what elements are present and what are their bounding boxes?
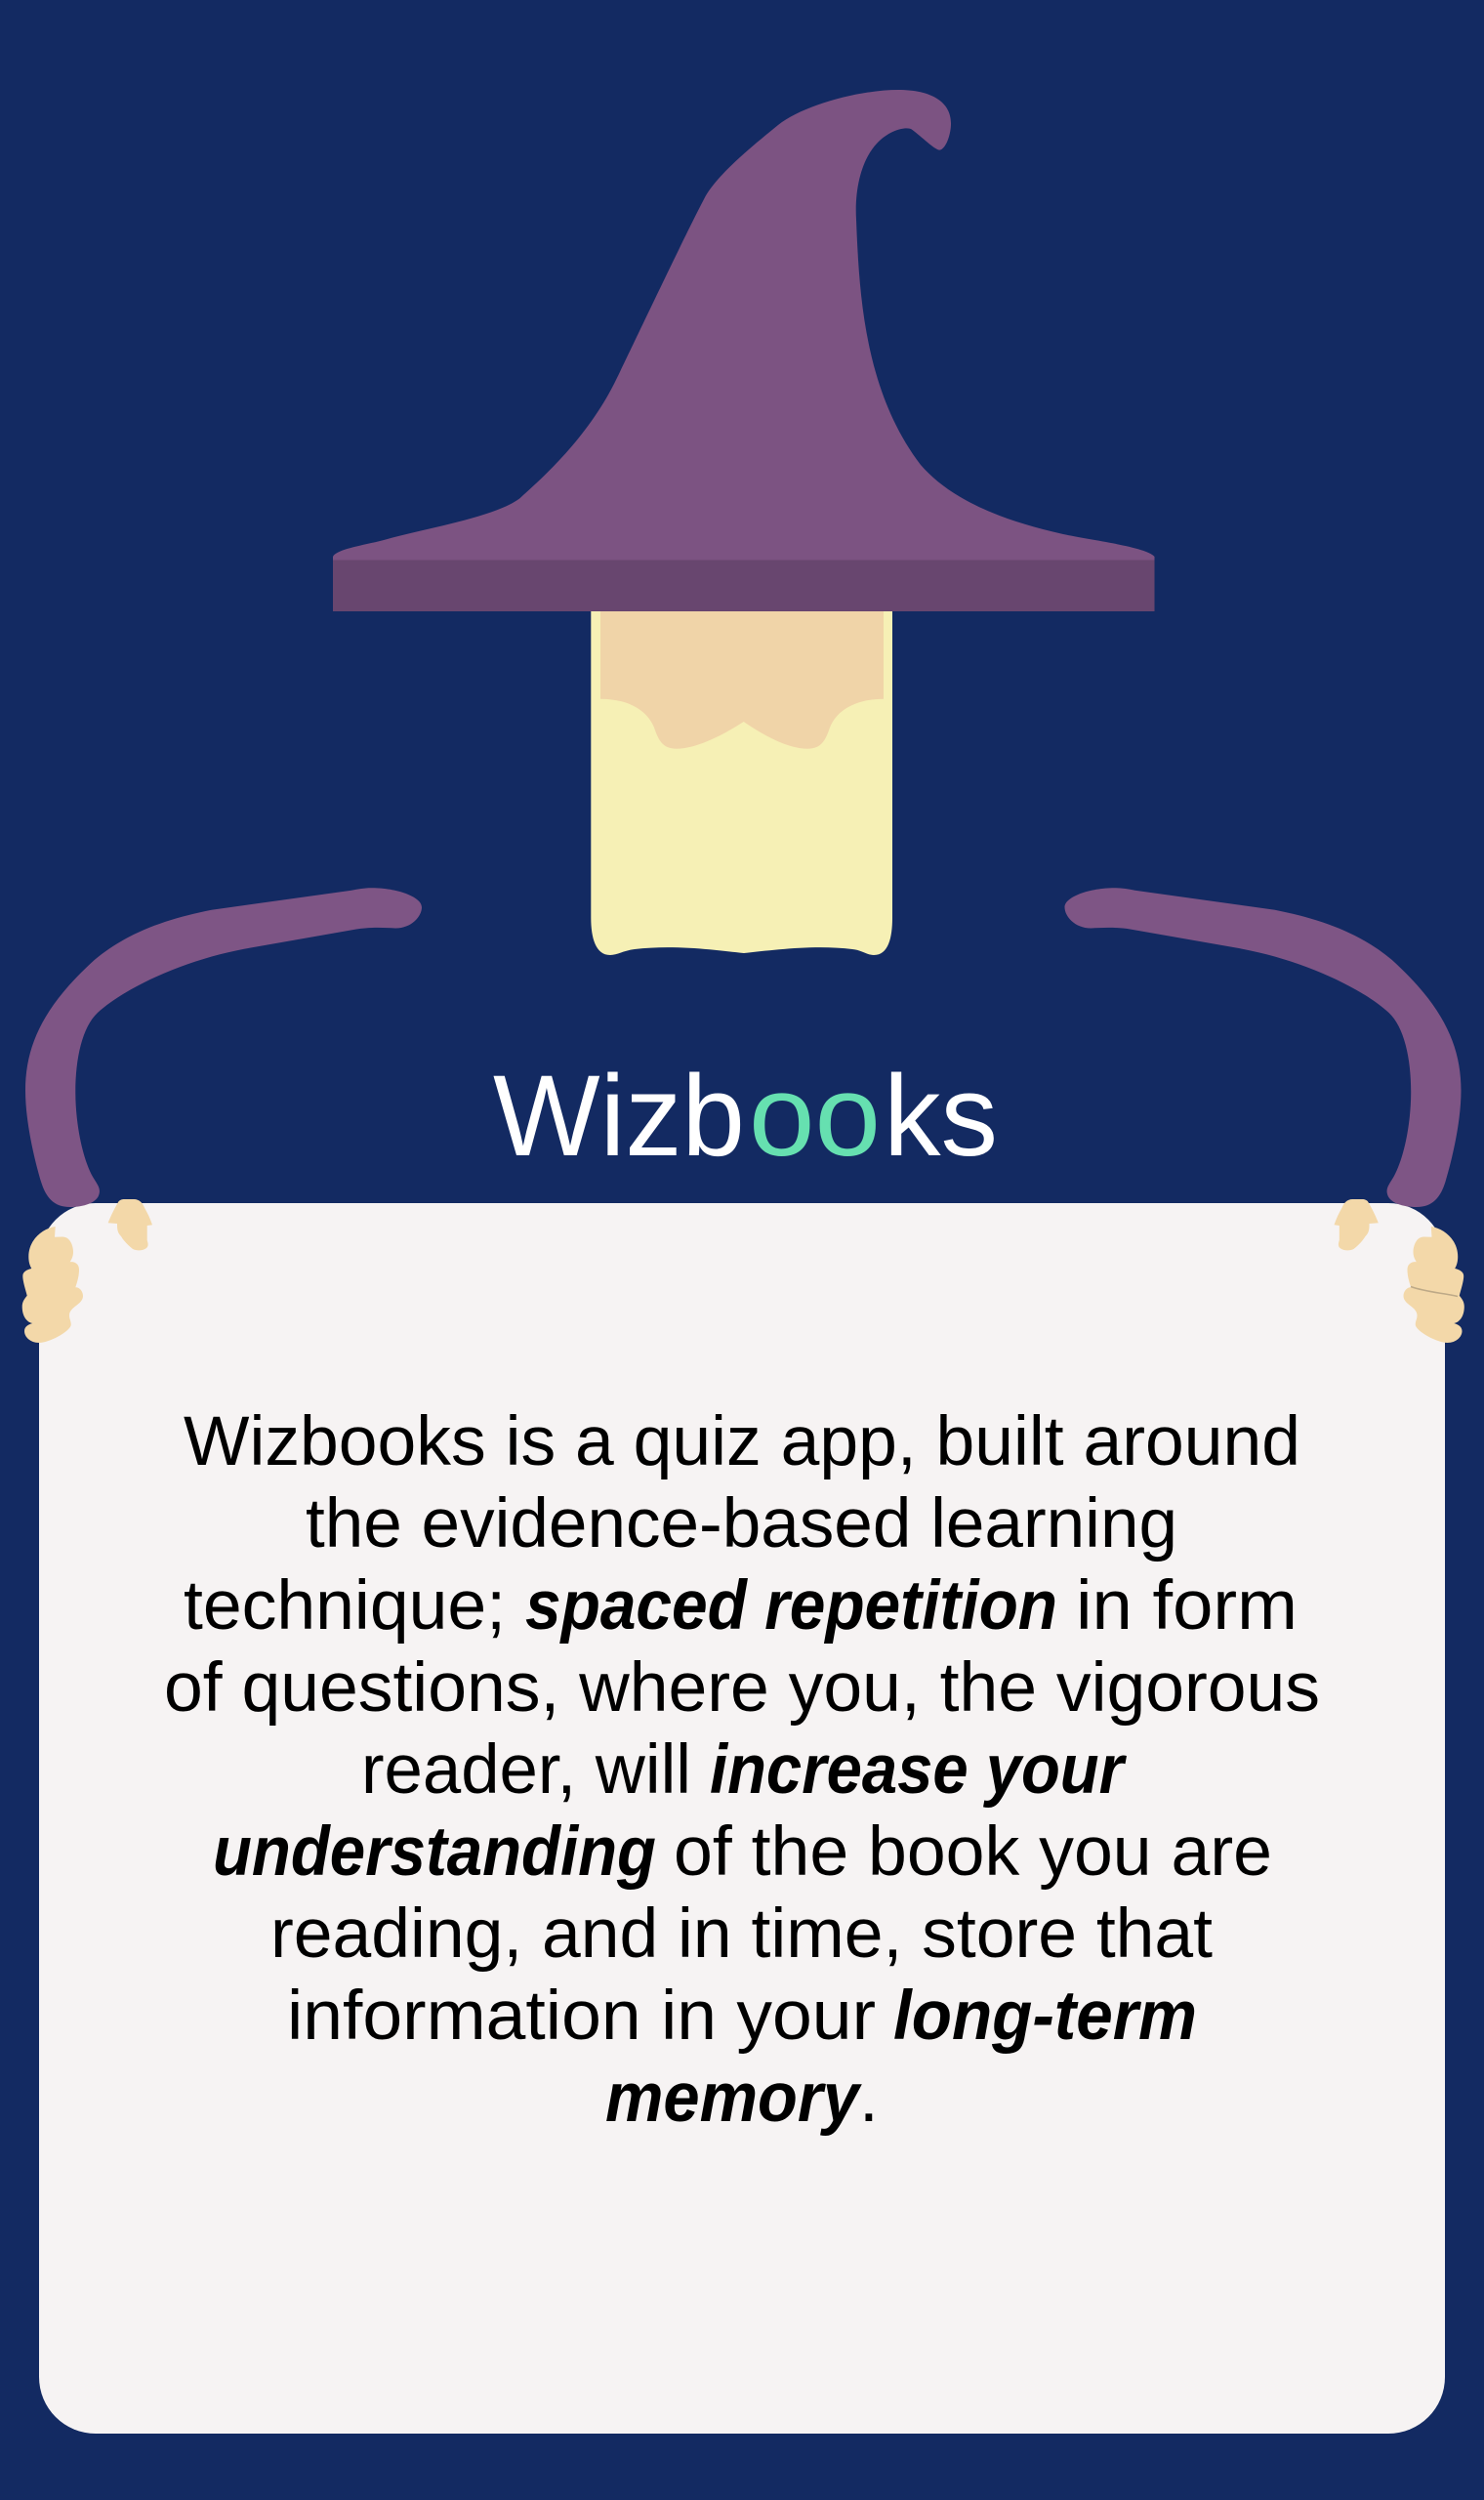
- body text: understanding: [213, 1813, 656, 1891]
- body text: .: [859, 2060, 879, 2137]
- body text: the evidence-based learning: [306, 1485, 1177, 1562]
- right arm: [1064, 888, 1461, 1207]
- panel: description card: [39, 1203, 1445, 2434]
- left hand: [22, 1227, 83, 1343]
- body text: long-term: [893, 1978, 1197, 2055]
- title: Wizbooks: [493, 1052, 998, 1181]
- body text: reading, and in time, store that: [270, 1896, 1213, 1973]
- right hand: [1404, 1227, 1464, 1343]
- wizard hat: [333, 90, 1154, 611]
- title: Wizbooks: Wizb: [493, 1052, 745, 1181]
- body text: increase your: [710, 1731, 1127, 1809]
- left arm: [25, 888, 422, 1207]
- body text: reader, will: [361, 1731, 691, 1809]
- wizard robe: [591, 611, 892, 955]
- title: Wizbooks: oo: [749, 1052, 881, 1181]
- body text: information in your: [287, 1978, 876, 2055]
- body text: in form: [1076, 1567, 1298, 1645]
- body text: [164, 1403, 1320, 2137]
- body text: spaced repetition: [525, 1567, 1057, 1645]
- body text: Wizbooks is a quiz app, built around: [184, 1403, 1300, 1480]
- wizard face: [600, 611, 884, 749]
- body text: technique;: [184, 1567, 506, 1645]
- title: Wizbooks: ks: [884, 1052, 998, 1181]
- body text: memory: [605, 2060, 862, 2137]
- body text: of the book you are: [674, 1813, 1272, 1891]
- body text: of questions, where you, the vigorous: [164, 1649, 1320, 1727]
- hat brim: [333, 561, 1154, 611]
- right thumb: [1334, 1199, 1379, 1250]
- left thumb: [108, 1199, 152, 1250]
